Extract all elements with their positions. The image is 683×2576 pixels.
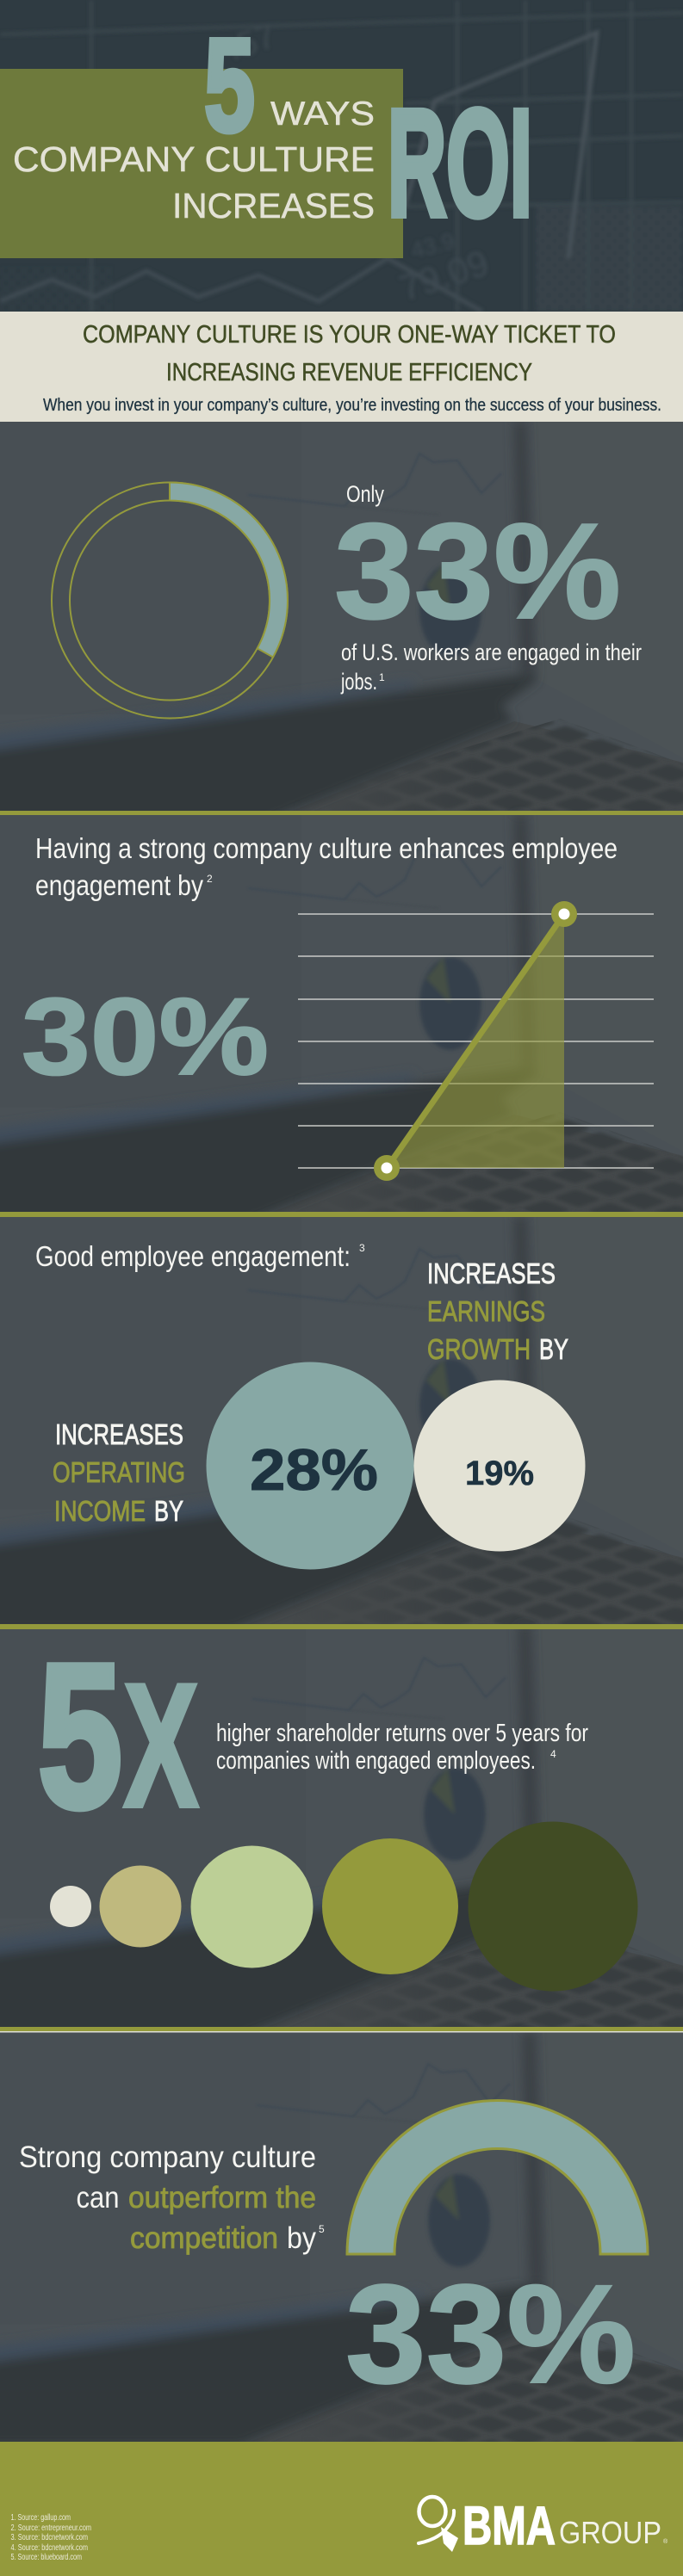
logo: BMA Group: ® xyxy=(663,2538,668,2545)
line chart xyxy=(298,901,654,1181)
banner heading line 1: COMPANY CULTURE IS YOUR ONE-WAY TICKET TO xyxy=(83,321,616,349)
label: operating income: INCOME xyxy=(54,1495,146,1527)
label: operating income xyxy=(53,1418,185,1527)
section background: culture enhances engagement xyxy=(0,815,683,1228)
label: earnings growth: EARNINGS xyxy=(427,1295,545,1327)
stat: 33 percent: 33% xyxy=(334,496,621,647)
description text: can xyxy=(76,2181,119,2215)
growing circles xyxy=(50,1821,637,1992)
text: workers engaged: 1 xyxy=(379,671,385,683)
title: ROI: ROI xyxy=(388,79,532,248)
source list xyxy=(10,2513,91,2562)
stat: 5x: 5 xyxy=(38,1622,122,1850)
section background: engagement stat xyxy=(0,422,683,835)
donut chart xyxy=(52,482,288,718)
source list: 3. Source: bdcnetwork.com xyxy=(10,2533,88,2542)
hero background: stock chart xyxy=(0,0,683,312)
heading text: Good employee engagement: xyxy=(35,1240,351,1272)
section background: outperform xyxy=(0,2032,683,2445)
description text: by xyxy=(287,2221,316,2255)
source list: 2. Source: entrepreneur.com xyxy=(10,2523,91,2533)
stat: 5x: X xyxy=(124,1648,198,1844)
panel: 33 percent engaged xyxy=(52,481,642,718)
divider bar xyxy=(0,2027,683,2033)
circle: 19 percent xyxy=(413,1381,586,1551)
banner heading line 2: INCREASING REVENUE EFFICIENCY xyxy=(166,359,532,386)
source list: 1. Source: gallup.com xyxy=(10,2513,71,2523)
panel: 5x shareholder returns xyxy=(38,1622,637,1992)
title backing block xyxy=(0,69,403,258)
heading text: engagement by xyxy=(35,869,203,901)
divider bar xyxy=(0,811,683,815)
circle: 19 percent: 19% xyxy=(465,1455,534,1492)
label: operating income: INCREASES xyxy=(55,1418,183,1450)
section background: good engagement xyxy=(0,1217,683,1630)
description text xyxy=(216,1720,588,1775)
stat: 30 percent: 30% xyxy=(22,975,269,1097)
text: only: Only xyxy=(346,481,384,507)
text: workers engaged xyxy=(340,639,642,695)
half donut gauge xyxy=(347,2100,648,2254)
label: earnings growth xyxy=(427,1257,568,1365)
text: workers engaged: jobs. xyxy=(340,669,377,695)
panel: intro banner xyxy=(0,312,683,422)
heading text: 3 xyxy=(359,1242,365,1254)
panel: outperform the competition xyxy=(19,2100,648,2412)
title: company culture: COMPANY CULTURE xyxy=(13,139,375,179)
logo: BMA Group: GROUP xyxy=(559,2515,661,2550)
divider bar xyxy=(0,1212,683,1217)
panel: footer xyxy=(0,2442,683,2576)
logo: BMA Group: BMA xyxy=(463,2496,556,2556)
label: operating income: OPERATING xyxy=(53,1456,185,1488)
hero background: stock chart: .57 xyxy=(223,17,281,68)
description text: Strong company culture xyxy=(19,2140,316,2174)
title: increases: INCREASES xyxy=(172,186,375,225)
description text: higher shareholder returns over 5 years for xyxy=(216,1720,588,1747)
description text xyxy=(19,2140,325,2255)
source list: 4. Source: bdcnetwork.com xyxy=(10,2543,88,2553)
hero background: stock chart: 79.09 xyxy=(394,242,494,309)
circle: 28 percent xyxy=(207,1362,413,1570)
heading text: 2 xyxy=(207,873,213,885)
panel: good employee engagement xyxy=(35,1240,586,1570)
description text: companies with engaged employees. xyxy=(216,1747,536,1775)
source list: 5. Source: blueboard.com xyxy=(10,2553,82,2562)
label: earnings growth: INCREASES xyxy=(427,1257,556,1289)
divider bar xyxy=(0,1624,683,1629)
logo: BMA Group xyxy=(419,2496,668,2556)
description text: 5 xyxy=(319,2223,325,2235)
hero background: stock chart: 43.9 xyxy=(408,227,457,263)
title: ways: WAYS xyxy=(270,96,375,133)
panel: 30 percent engagement xyxy=(22,832,654,1181)
panel: hero header xyxy=(0,0,683,312)
label: operating income: BY xyxy=(154,1495,183,1527)
label: earnings growth: GROWTH xyxy=(427,1333,531,1365)
heading text xyxy=(35,832,618,901)
circle: 28 percent: 28% xyxy=(250,1437,378,1503)
label: earnings growth: BY xyxy=(539,1333,568,1365)
section background: shareholder returns xyxy=(0,1626,683,2039)
description text: 4 xyxy=(550,1748,556,1760)
numeral 5: 5 xyxy=(204,11,255,159)
stat: 33 percent: 33% xyxy=(345,2255,636,2412)
description text: competition xyxy=(130,2221,278,2255)
description text: outperform the xyxy=(128,2181,316,2215)
